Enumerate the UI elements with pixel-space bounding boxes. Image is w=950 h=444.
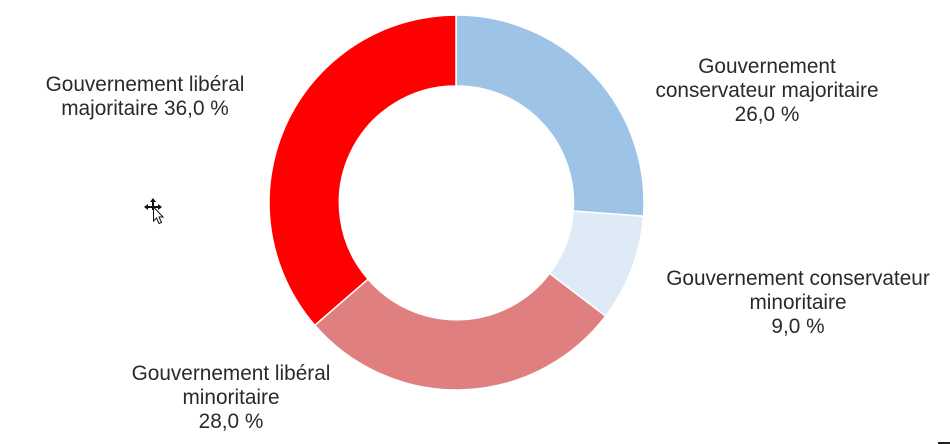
label: conservateur minoritaire: 9,0 %: [771, 315, 825, 338]
label: libéral minoritaire: 28,0 %: [199, 410, 263, 433]
label: conservateur majoritaire: Gouvernement: [698, 55, 836, 78]
segment: libéral majoritaire 36%: [269, 15, 456, 325]
segment: libéral minoritaire 28%: [315, 273, 606, 390]
label: conservateur minoritaire: Gouvernement conservateur: [666, 267, 930, 290]
segment: conservateur minoritaire 9%: [550, 211, 644, 316]
label: conservateur minoritaire: minoritaire: [749, 291, 847, 314]
icon: move cursor: [144, 198, 163, 224]
segment: conservateur majoritaire 26%: [456, 15, 644, 216]
label: conservateur majoritaire: 26,0 %: [735, 103, 799, 126]
label: libéral majoritaire: Gouvernement libéral: [46, 73, 244, 96]
label: conservateur majoritaire: conservateur majoritaire: [655, 79, 879, 102]
corner dash: [938, 442, 950, 444]
donut segments: [269, 15, 644, 390]
label: libéral minoritaire: minoritaire: [182, 386, 280, 409]
label: libéral majoritaire: majoritaire 36,0 %: [61, 97, 229, 120]
label: libéral minoritaire: Gouvernement libéral: [132, 362, 330, 385]
